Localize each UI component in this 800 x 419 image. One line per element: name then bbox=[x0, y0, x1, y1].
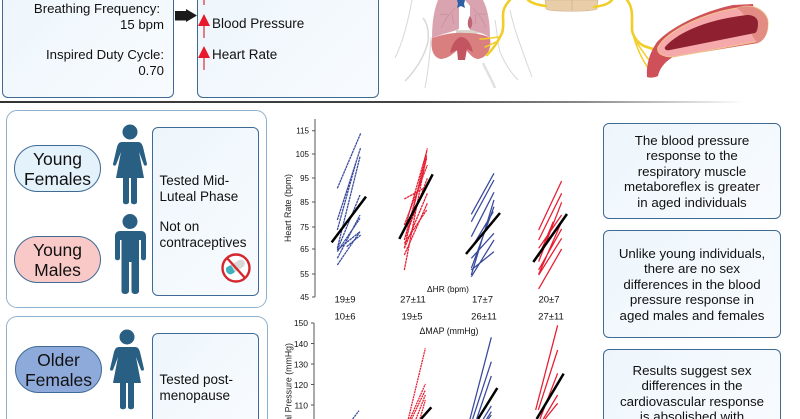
text: mid-luteal phase: Tested Mid- bbox=[160, 173, 229, 188]
axis: heart rate: 85 bbox=[300, 198, 310, 207]
axis: heart rate: 65 bbox=[300, 245, 310, 254]
axis: heart rate: 55 bbox=[300, 270, 310, 279]
text: inspired duty cycle: Inspired Duty Cycle: bbox=[46, 47, 164, 62]
axis: heart rate: 105 bbox=[296, 150, 310, 159]
axis: heart rate: 45 bbox=[300, 293, 310, 302]
label: young males bbox=[14, 236, 101, 283]
text: delta HR values: 17±7 bbox=[472, 294, 493, 306]
series: young males heart rate bbox=[404, 148, 427, 270]
label: older females: Older bbox=[37, 350, 80, 370]
panel: older participants bbox=[6, 316, 268, 419]
callout: results bbox=[603, 349, 781, 419]
panel: breathing protocol bbox=[2, 0, 174, 98]
text: not on contraceptives bbox=[160, 219, 247, 250]
text: delta HR values: 10±6 bbox=[334, 312, 356, 322]
callout: no sex differences: pressure response in bbox=[630, 292, 754, 307]
text: delta HR values: ΔMAP (mmHg) bbox=[420, 326, 479, 336]
text: not on contraceptives: contraceptives bbox=[160, 234, 247, 250]
callout: no sex differences: differences in the blood bbox=[623, 277, 761, 292]
text: inspired duty cycle: 0.70 bbox=[138, 62, 164, 78]
series: pressure bbox=[353, 325, 564, 419]
callout: results: differences in the bbox=[641, 378, 743, 393]
callout: no sex differences bbox=[603, 230, 781, 338]
callout: greater in aged: response to the bbox=[646, 148, 738, 163]
axis: pressure: 130 bbox=[294, 360, 308, 370]
text: not on contraceptives: Not on bbox=[160, 219, 199, 234]
series: older females heart rate bbox=[471, 173, 494, 277]
callout: results: cardiovascular response bbox=[620, 394, 764, 409]
text: blood pressure: Blood Pressure bbox=[212, 16, 304, 31]
callout: greater in aged: The blood pressure bbox=[635, 133, 749, 148]
callout: greater in aged: in aged individuals bbox=[637, 195, 747, 210]
axis: heart rate: Heart Rate (bpm) bbox=[283, 174, 293, 242]
label: young females: Females bbox=[24, 168, 91, 188]
text: breathing frequency: 15 bpm bbox=[120, 16, 164, 32]
panel: young participants bbox=[6, 110, 267, 308]
text: delta HR values: ΔHR (bpm) bbox=[427, 284, 469, 294]
text: mid-luteal phase bbox=[160, 173, 238, 204]
panel: cardiovascular response bbox=[197, 0, 379, 98]
panel: older testing conditions bbox=[152, 333, 259, 419]
text: delta HR values: 27±11 bbox=[538, 312, 564, 322]
text: delta HR values: 26±11 bbox=[471, 312, 497, 322]
axis: pressure: 140 bbox=[294, 339, 308, 349]
axis: heart rate: 75 bbox=[300, 223, 310, 232]
text: post-menopause: Tested post- bbox=[160, 372, 233, 387]
text: inspired duty cycle bbox=[46, 47, 164, 78]
text: delta HR values: 19±9 bbox=[334, 294, 356, 306]
text: post-menopause: menopause bbox=[160, 388, 230, 402]
callout: greater in aged: metaboreflex is greater bbox=[624, 179, 760, 194]
series: older males heart rate bbox=[539, 181, 562, 289]
callout: greater in aged bbox=[603, 123, 781, 219]
callout: results: Results suggest sex bbox=[632, 363, 752, 378]
text: heart rate: Heart Rate bbox=[212, 47, 277, 62]
divider bbox=[0, 101, 745, 103]
label: young females: Young bbox=[33, 148, 82, 168]
axis: pressure: 120 bbox=[294, 380, 308, 390]
label: young males: Males bbox=[34, 260, 81, 280]
label: older females bbox=[15, 346, 102, 393]
means: heart rate bbox=[332, 174, 567, 262]
text: mid-luteal phase: Luteal Phase bbox=[160, 188, 238, 204]
text: delta HR values: 20±7 bbox=[538, 294, 560, 306]
axis: pressure: 150 bbox=[294, 318, 308, 328]
label: older females: Females bbox=[25, 370, 92, 390]
text: delta HR values: 27±11 bbox=[400, 294, 426, 306]
axis: pressure bbox=[284, 318, 314, 419]
callout: no sex differences: aged males and females bbox=[620, 308, 764, 323]
text: delta HR values bbox=[334, 284, 564, 336]
text: breathing frequency bbox=[34, 1, 164, 32]
label: young females bbox=[14, 145, 101, 192]
callout: no sex differences: there are no sex bbox=[644, 261, 740, 276]
callout: greater in aged: respiratory muscle bbox=[638, 164, 746, 179]
series: young females heart rate bbox=[337, 133, 361, 265]
axis: heart rate: 115 bbox=[296, 127, 310, 136]
callout: no sex differences: Unlike young individuals, bbox=[619, 246, 765, 261]
text: post-menopause bbox=[160, 372, 233, 403]
text: breathing frequency: Breathing Frequency: bbox=[34, 1, 160, 16]
axis: heart rate: 95 bbox=[300, 174, 310, 183]
axis: pressure: 110 bbox=[294, 400, 308, 410]
axis: heart rate bbox=[283, 119, 315, 302]
label: young males: Young bbox=[33, 240, 82, 260]
text: delta HR values: 19±5 bbox=[401, 312, 423, 322]
panel: young testing conditions bbox=[152, 127, 259, 296]
